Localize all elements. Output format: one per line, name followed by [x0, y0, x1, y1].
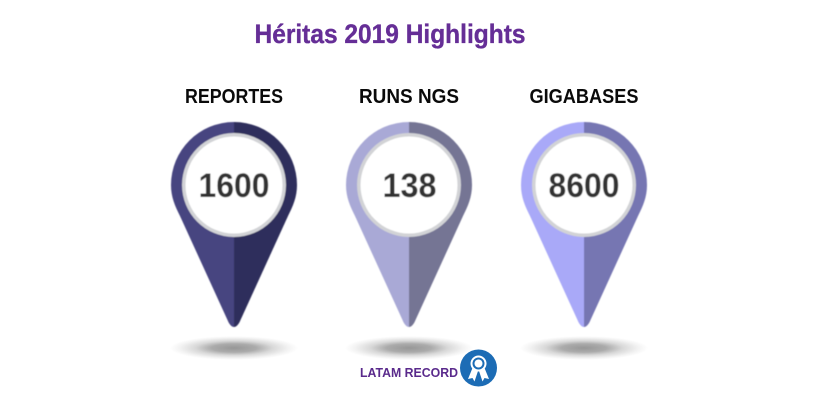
pin right half — [409, 122, 472, 327]
icon: award ribbon badge — [460, 350, 497, 386]
heading: GIGABASES: GIGABASES — [530, 85, 638, 108]
pin right half — [584, 122, 647, 327]
map pin: REPORTES 1600 — [171, 122, 297, 327]
value: 8600 — [548, 167, 620, 205]
ring — [532, 133, 636, 237]
value: 1600 — [198, 167, 270, 205]
pin right half — [234, 122, 297, 327]
label: LATAM RECORD: LATAM RECORD — [360, 366, 458, 380]
map pin: GIGABASES 8600 — [521, 122, 647, 327]
white disc — [186, 136, 282, 234]
pin left half — [171, 122, 234, 327]
map pin: RUNS NGS 138 — [346, 122, 472, 327]
pin left half — [346, 122, 409, 327]
shadow: pin 1 — [170, 336, 298, 360]
heading: REPORTES: REPORTES — [185, 85, 283, 108]
heading: RUNS NGS: RUNS NGS — [359, 85, 459, 108]
pin left half — [521, 122, 584, 327]
title: Héritas 2019 Highlights — [254, 19, 526, 49]
shadow: pin 3 — [520, 336, 648, 360]
white disc — [536, 136, 632, 234]
ring — [357, 133, 461, 237]
ring — [182, 133, 286, 237]
value: 138 — [382, 167, 436, 205]
white disc — [360, 136, 458, 234]
shadow: pin 2 — [345, 336, 473, 360]
